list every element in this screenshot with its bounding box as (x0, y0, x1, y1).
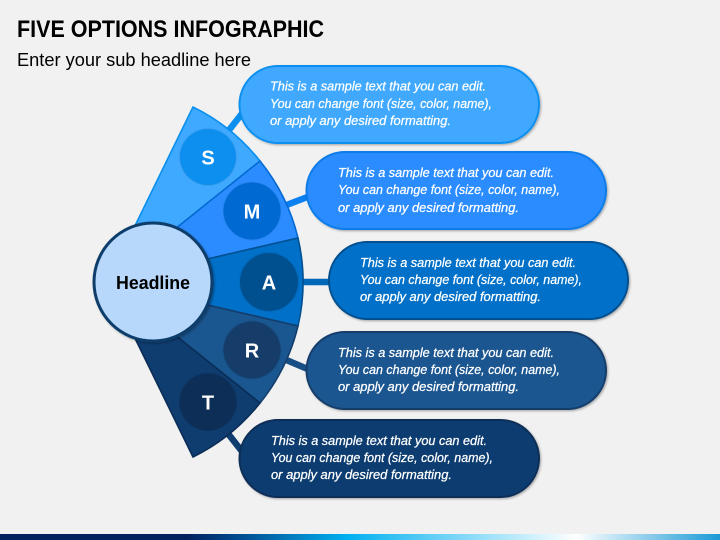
callout 1: This is a sample text that you can edit. (270, 80, 486, 94)
letter badge R (224, 322, 280, 378)
letter badge M (224, 182, 280, 240)
connector lines (226, 111, 332, 454)
callout 1: or apply any desired formatting. (270, 114, 451, 128)
sub headline: Enter your sub headline here (17, 50, 251, 70)
footer gradient bar (0, 534, 720, 540)
segment A (190, 238, 303, 326)
central headline circle (94, 223, 212, 341)
central headline circle: Headline (116, 273, 190, 293)
segment R (165, 301, 298, 403)
segment S (130, 107, 260, 237)
callout 2 (306, 152, 606, 229)
letter badge S (180, 129, 236, 185)
callout 4: This is a sample text that you can edit. (338, 346, 554, 360)
letter badge S: S (201, 148, 215, 170)
letter badge A (240, 253, 298, 311)
letter badge T: T (202, 392, 214, 414)
letter badge R: R (245, 340, 260, 362)
callout 5: or apply any desired formatting. (271, 468, 452, 482)
callout 1 (240, 66, 539, 143)
callout 4: You can change font (size, color, name), (338, 363, 560, 377)
callout 5: This is a sample text that you can edit. (271, 434, 487, 448)
callout 5 (240, 420, 539, 497)
letter badge T (180, 374, 236, 430)
callout 2: or apply any desired formatting. (338, 201, 519, 215)
callout 2: You can change font (size, color, name), (338, 183, 560, 197)
callout 2: This is a sample text that you can edit. (338, 166, 554, 180)
callout 4: or apply any desired formatting. (338, 380, 519, 394)
callout 4 (306, 332, 606, 409)
fan of five segments (130, 107, 303, 457)
letter badge A: A (262, 272, 276, 294)
callout 3: This is a sample text that you can edit. (360, 256, 576, 270)
title: FIVE OPTIONS INFOGRAPHIC (17, 16, 324, 43)
callout 1: You can change font (size, color, name), (270, 97, 492, 111)
callout 3: or apply any desired formatting. (360, 290, 541, 304)
letter badge M: M (244, 202, 260, 224)
callout 5: You can change font (size, color, name), (271, 451, 493, 465)
callout 3: You can change font (size, color, name), (360, 273, 582, 287)
callout 3 (329, 242, 628, 319)
segment M (165, 161, 298, 263)
segment T (130, 327, 260, 457)
